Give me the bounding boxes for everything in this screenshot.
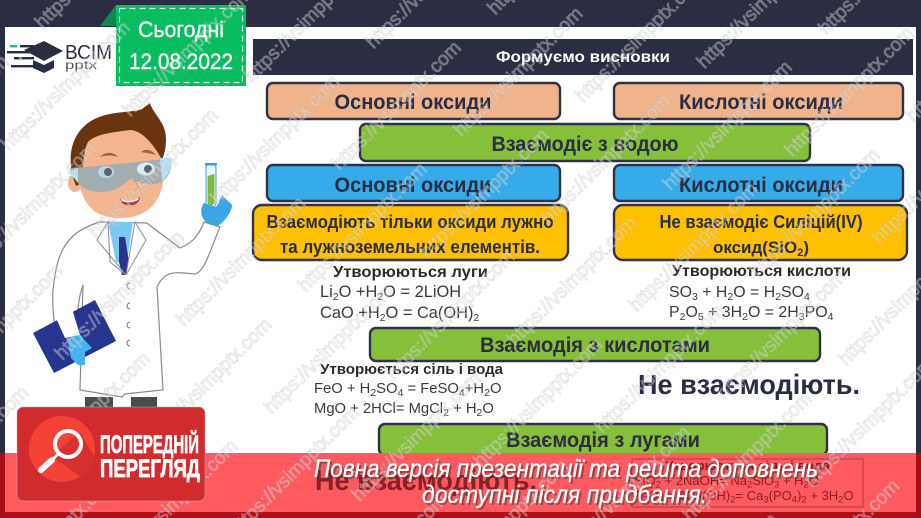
heading: interaction with alkalis: Взаємодія з лугами xyxy=(506,429,700,452)
date badge: 12.08.2022 xyxy=(129,49,233,74)
buttons xyxy=(127,283,130,346)
box: acid oxides blue xyxy=(614,165,903,201)
text: water reaction, acid: O xyxy=(685,304,698,321)
text: acid oxides do not react: Не взаємодіють. xyxy=(638,369,860,400)
title bar xyxy=(253,39,913,75)
logo: ВСІМ pptx: pptx xyxy=(65,58,97,72)
box: basic oxides: Основні оксиди xyxy=(334,91,492,114)
logo: ВСІМ pptx xyxy=(7,41,112,73)
text: water reaction, acid: PO xyxy=(805,304,828,321)
box: basic oxides blue: Основні оксиди xyxy=(334,174,492,197)
callout: silicon oxide exception: ) xyxy=(803,238,809,257)
text: water reaction, basic: Li xyxy=(320,283,333,301)
sleeve over clipboard xyxy=(54,297,80,338)
logo: ВСІМ pptx: ВСІМ xyxy=(65,42,112,64)
red preview banner: 2 xyxy=(747,480,752,490)
eyes xyxy=(98,166,114,178)
callout: basic oxides condition xyxy=(253,205,568,260)
text: water reaction, basic xyxy=(320,264,488,324)
red preview banner: 2 xyxy=(838,494,843,506)
text: water reaction, basic: O = 2LiOH xyxy=(383,283,461,301)
right glove xyxy=(201,195,232,226)
smile xyxy=(120,197,140,205)
text: acid reaction, basic: Утворюється сіль і вода xyxy=(320,361,504,378)
text: water reaction, basic: Утворюються луги xyxy=(333,264,488,281)
text: acid reaction, basic xyxy=(314,361,504,419)
shirt and tie xyxy=(108,222,133,262)
text: acid reaction, basic: MgO + 2HCl= MgCl xyxy=(314,401,443,417)
text: acid reaction, basic: 2 xyxy=(370,387,376,399)
text: water reaction, acid: 2 xyxy=(775,291,781,303)
red preview banner: 2 xyxy=(643,494,648,506)
text: water reaction, acid: 3 xyxy=(692,291,698,303)
banner notice text: доступні після придбання. xyxy=(424,483,709,511)
lab coat xyxy=(53,222,220,397)
lapels xyxy=(97,222,146,275)
text: water reaction, basic: 2 xyxy=(473,312,479,324)
text: water reaction, acid: O = H xyxy=(733,284,775,301)
text: acid reaction, basic: O xyxy=(482,401,494,417)
scientist illustration xyxy=(33,103,232,412)
nose xyxy=(133,180,138,190)
text: water reaction, acid: 2 xyxy=(742,311,748,323)
red preview banner: 2 xyxy=(803,480,809,490)
callout: basic oxides condition: та лужноземельних елементів. xyxy=(280,237,540,257)
banner notice text: Повна версія презентації та решта доповнень xyxy=(316,457,820,485)
text: water reaction, acid: + H xyxy=(698,284,727,301)
red preview banner: + 3H xyxy=(807,488,838,503)
red preview banner: + H xyxy=(779,473,803,488)
text: water reaction, acid: 3 xyxy=(799,311,805,323)
text: water reaction, basic: O = Ca(OH) xyxy=(386,304,473,322)
heading: interaction with acids: Взаємодія з кислотами xyxy=(480,334,710,357)
title bar: Формуємо висновки xyxy=(496,49,670,66)
text: water reaction, basic: 2 xyxy=(377,291,383,303)
preview badge xyxy=(17,407,205,501)
text: water reaction, acid: 2 xyxy=(727,291,733,303)
red preview banner: 4 xyxy=(792,494,797,506)
text: water reaction, basic: 2 xyxy=(333,291,339,303)
text: acid reaction, basic: FeO + H xyxy=(314,381,370,397)
red preview banner: O xyxy=(843,488,854,503)
red preview banner: O xyxy=(809,473,819,488)
red preview banner: Утворюється сіль і вода xyxy=(665,458,831,473)
text: acid reaction, basic: 2 xyxy=(477,407,483,419)
red preview banner: 2 xyxy=(801,494,807,506)
text: water reaction, acid: Утворюються кислоти xyxy=(672,263,851,280)
red preview banner: + 2NaOH= Na xyxy=(661,473,748,488)
text: acid reaction, basic: 4 xyxy=(398,387,404,399)
test tube xyxy=(206,164,216,207)
text: water reaction, acid xyxy=(669,263,851,323)
callout: basic oxides condition: Взаємодіють тільки оксиди лужно xyxy=(266,212,554,232)
text: water reaction, acid: P xyxy=(669,304,680,321)
red preview banner: 3 xyxy=(774,480,779,490)
goggles xyxy=(70,158,172,192)
red preview banner: (PO xyxy=(769,488,792,503)
text: water reaction, basic: O +H xyxy=(339,283,377,301)
left glove xyxy=(67,335,92,365)
text: water reaction, basic: 2 xyxy=(380,312,386,324)
box: acid oxides blue: Кислотні оксиди xyxy=(679,174,843,197)
heading: interaction with acids xyxy=(370,328,820,361)
callout: silicon oxide exception: 2 xyxy=(797,247,803,259)
red preview banner xyxy=(0,453,921,518)
text: water reaction, acid: 4 xyxy=(828,311,834,323)
box: basic oxides blue xyxy=(267,165,560,201)
red preview banner: ) xyxy=(797,488,801,503)
text: water reaction, acid: + 3H xyxy=(704,304,742,321)
text: acid reaction, basic: 2 xyxy=(484,387,490,399)
text: acid reaction, basic: 4 xyxy=(459,387,465,399)
box: acid oxides: Кислотні оксиди xyxy=(679,91,843,114)
text: water reaction, acid: SO xyxy=(669,284,692,301)
heading: interaction with water xyxy=(360,124,810,161)
red preview banner: 3 xyxy=(763,494,769,506)
text: water reaction, acid: 4 xyxy=(804,291,810,303)
callout: silicon oxide exception: Не взаємодіє Силіцій(IV) xyxy=(660,212,862,232)
head xyxy=(78,120,164,218)
text: acid reaction, basic: = FeSO xyxy=(403,381,459,397)
clipboard xyxy=(33,300,116,373)
preview badge: ПОПЕРЕДНІЙ xyxy=(100,429,199,459)
trousers xyxy=(85,397,157,412)
preview badge: ПЕРЕГЛЯД xyxy=(100,455,200,483)
text: acid reaction, basic: O xyxy=(490,381,501,397)
text: water reaction, acid: SO xyxy=(781,284,804,301)
text: water reaction, acid: 5 xyxy=(698,311,704,323)
text: acid reaction, basic: +H xyxy=(465,381,484,397)
eyebrows xyxy=(100,150,156,157)
hair xyxy=(71,103,166,186)
callout: silicon oxide exception xyxy=(614,205,907,260)
red preview banner: 5 xyxy=(658,494,663,506)
text: acid reaction, basic: + H xyxy=(449,401,477,417)
text: water reaction, acid: 2 xyxy=(680,311,686,323)
red preview banner: SiO xyxy=(752,473,774,488)
date badge: Сьогодні xyxy=(138,17,224,42)
heading: interaction with alkalis xyxy=(379,424,827,455)
date badge xyxy=(100,5,246,86)
callout: silicon oxide exception: оксид(SiO xyxy=(713,238,797,257)
red preview banner: + 3Ca(OH) xyxy=(663,488,730,503)
red preview banner: SiO xyxy=(634,473,656,488)
box: acid oxides xyxy=(614,83,903,119)
red preview banner: O xyxy=(648,488,658,503)
red preview banner: 2 xyxy=(730,494,736,506)
red preview banner: Не взаємодіють. xyxy=(315,465,537,497)
banner notice text xyxy=(314,455,820,511)
banner notice text: Повна версія презентації та решта доповнень xyxy=(314,455,818,483)
box: basic oxides xyxy=(267,83,560,119)
text: acid reaction, basic: 2 xyxy=(443,407,449,419)
red preview banner: P xyxy=(634,488,643,503)
text: water reaction, basic: CaO +H xyxy=(320,304,380,322)
heading: interaction with water: Взаємодіє з водою xyxy=(492,133,679,156)
banner notice text: доступні після придбання. xyxy=(422,481,707,509)
text: acid reaction, basic: SO xyxy=(376,381,398,397)
text: water reaction, acid: O = 2H xyxy=(748,304,799,321)
red preview banner: 2 xyxy=(656,480,661,490)
red preview banner: = Ca xyxy=(736,488,764,503)
